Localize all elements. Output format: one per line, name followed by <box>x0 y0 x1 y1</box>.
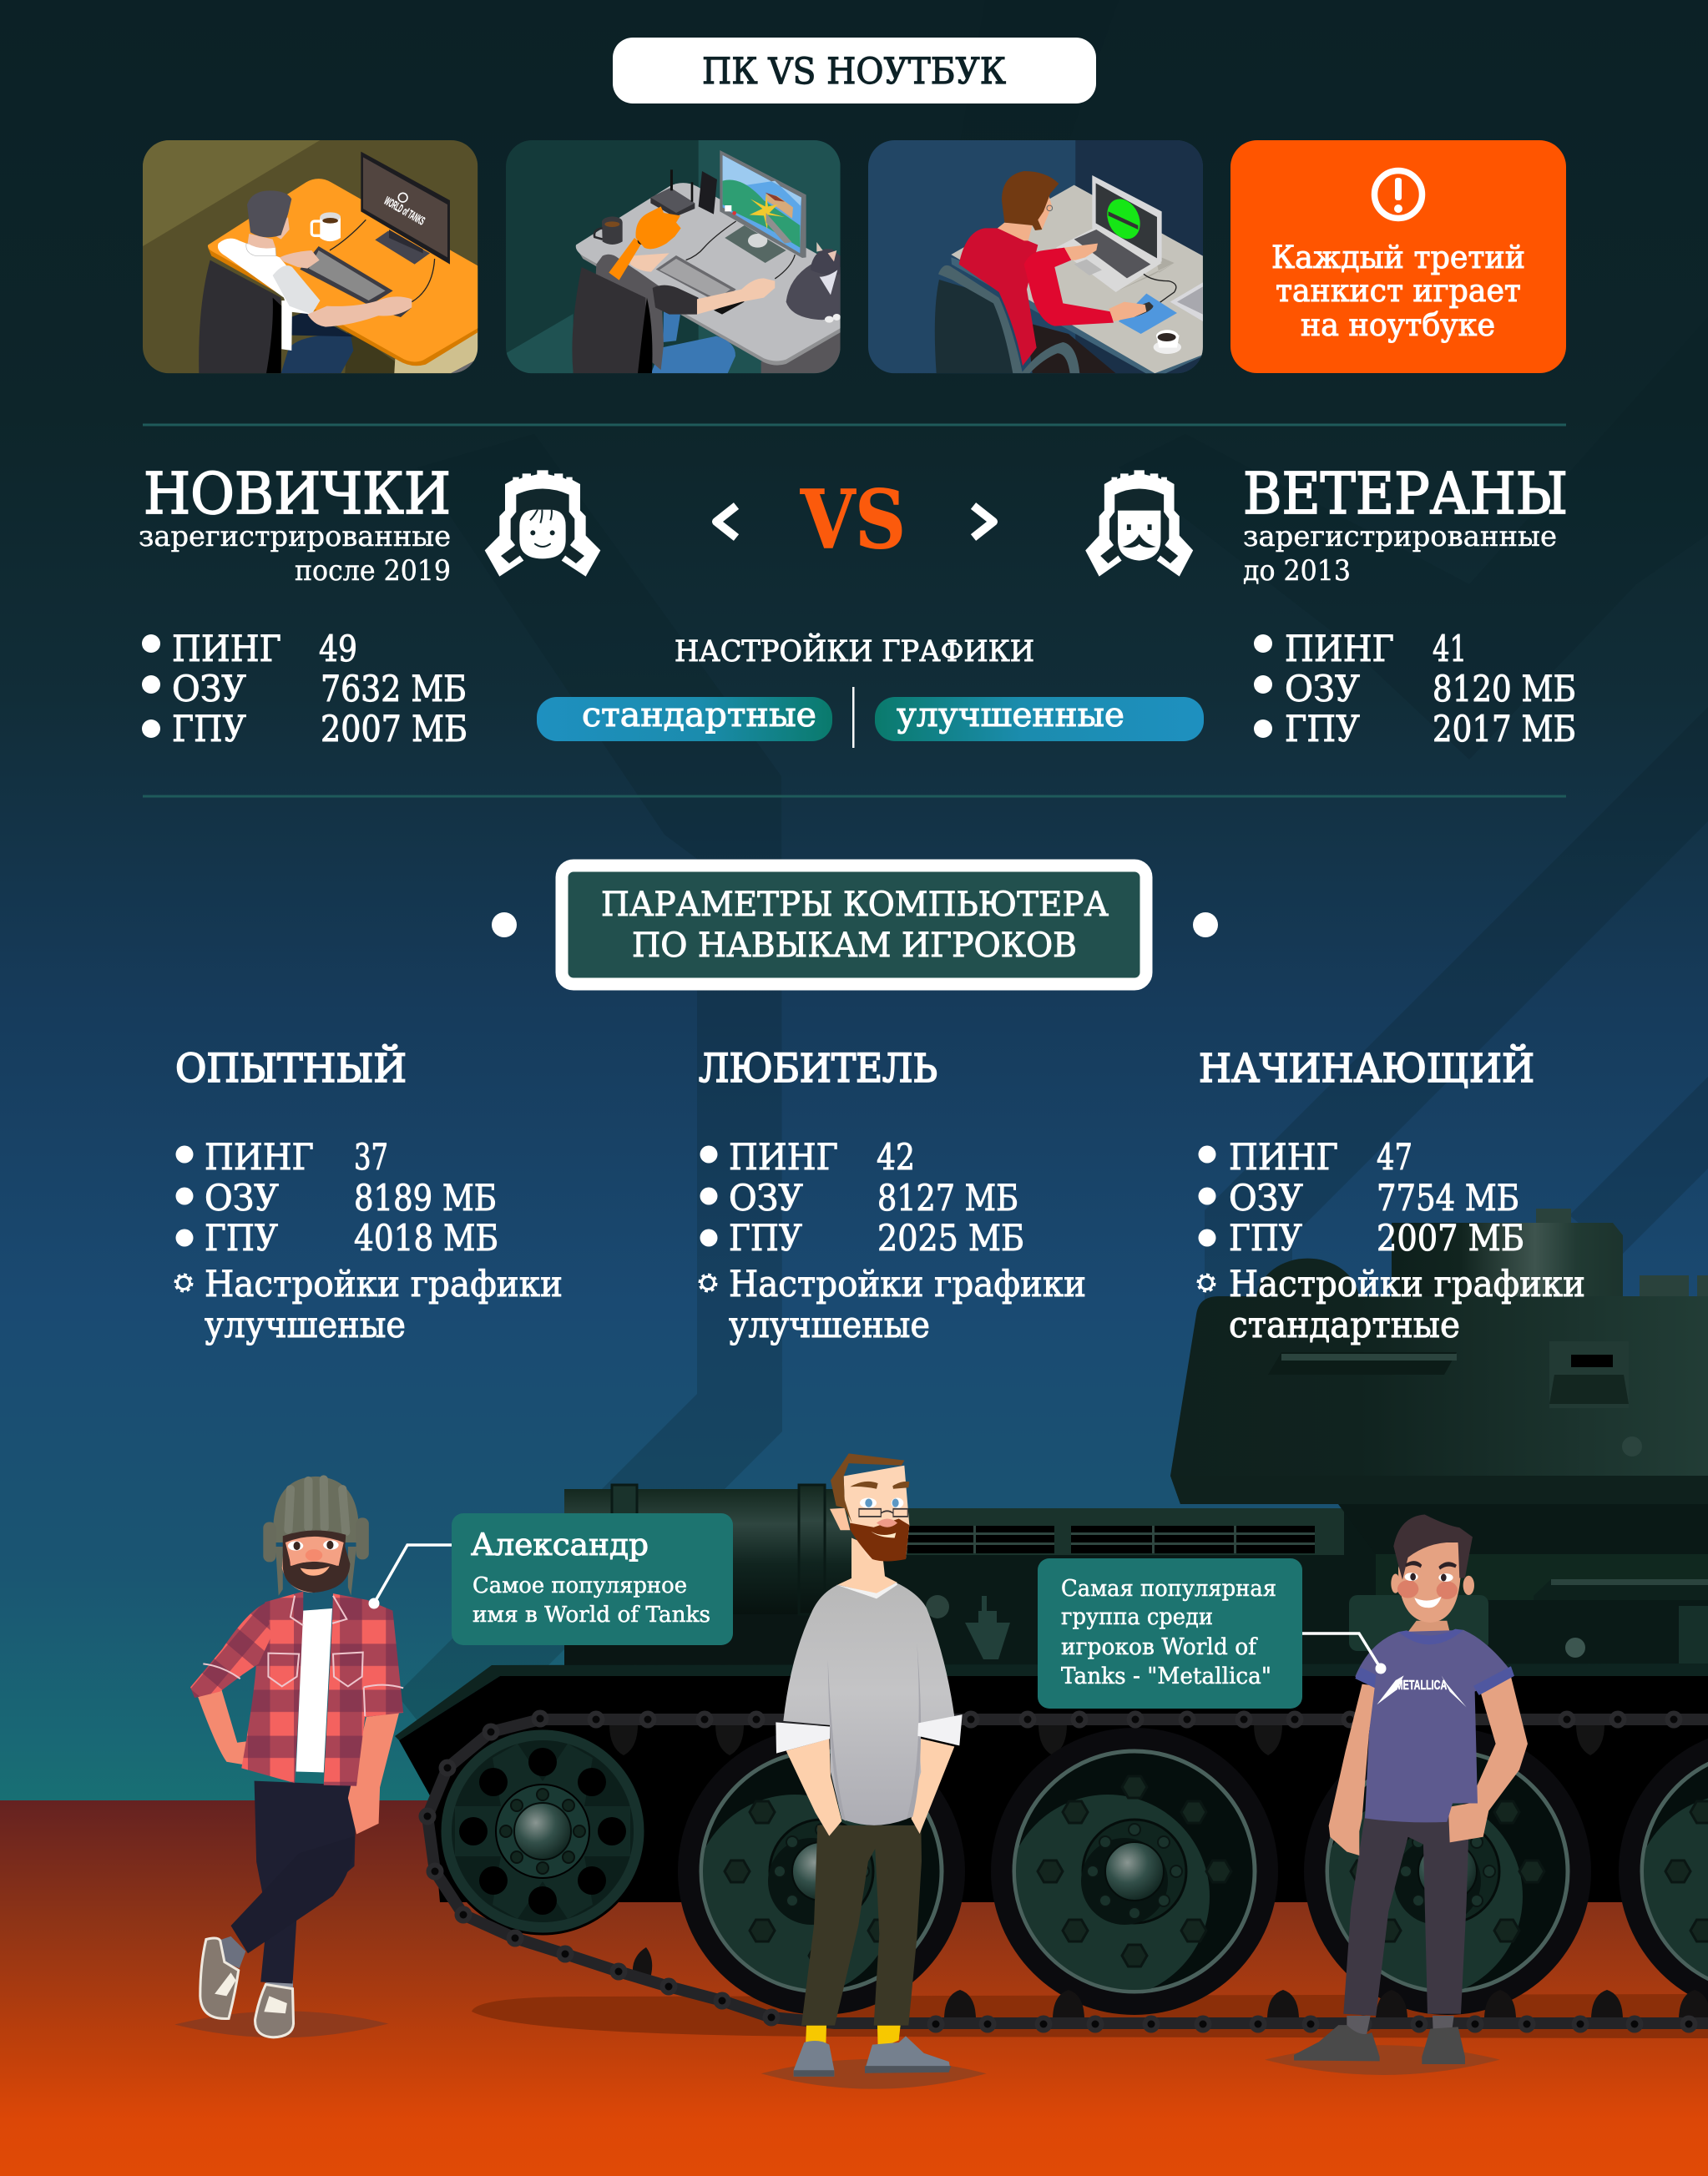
stats: novices <box>142 629 467 750</box>
column: beginner: 47 <box>1377 1137 1412 1179</box>
column: amateur: улучшеные <box>729 1305 930 1346</box>
column: experienced: ПИНГ <box>205 1137 314 1179</box>
column: amateur: 8127 МБ <box>877 1178 1018 1219</box>
column: experienced: 37 <box>354 1137 388 1179</box>
column: experienced <box>175 1044 563 1346</box>
column: beginner: Настройки графики <box>1229 1264 1585 1305</box>
graphics settings legend <box>537 633 1204 748</box>
column: amateur: ГПУ <box>729 1218 802 1260</box>
section heading: ПАРАМЕТРЫ КОМПЬЮТЕРА <box>601 886 1109 924</box>
column: beginner: 7754 МБ <box>1377 1178 1519 1219</box>
stats: veterans <box>1254 629 1576 750</box>
card: orange callout: Каждый третий <box>1271 240 1525 275</box>
person: man in grey sweater <box>761 1453 987 2089</box>
callout: Metallica: Tanks - "Metallica" <box>1061 1664 1271 1689</box>
heading: novices: после 2019 <box>295 554 451 588</box>
column: experienced: ОЗУ <box>205 1178 279 1219</box>
card: orange callout: на ноутбуке <box>1301 307 1495 343</box>
column: beginner: НАЧИНАЮЩИЙ <box>1199 1044 1534 1092</box>
background bands <box>397 0 1708 1763</box>
stats: novices: ОЗУ <box>172 669 246 710</box>
stats: veterans: 2017 МБ <box>1433 709 1576 750</box>
card: PC desk, orange table <box>143 140 478 373</box>
column: experienced: 4018 МБ <box>354 1218 498 1260</box>
section heading <box>492 866 1218 984</box>
ground <box>0 1800 1708 2176</box>
stats: veterans: ГПУ <box>1285 709 1360 750</box>
stats: novices: ГПУ <box>172 709 246 750</box>
column: experienced: 8189 МБ <box>354 1178 497 1219</box>
stats: veterans: 8120 МБ <box>1433 669 1576 710</box>
column: amateur <box>699 1046 1086 1346</box>
chevron right <box>973 506 993 538</box>
stats: novices: 7632 МБ <box>321 669 467 710</box>
stats: veterans: ПИНГ <box>1285 629 1394 670</box>
title pill: ПК VS НОУТБУК <box>702 51 1006 93</box>
callout: Metallica: группа среди <box>1061 1604 1213 1630</box>
column: amateur: ЛЮБИТЕЛЬ <box>699 1046 937 1092</box>
VS label: VS <box>800 472 906 567</box>
column: beginner: ОЗУ <box>1229 1178 1303 1219</box>
hull <box>395 1664 1708 1902</box>
card: PC desk, orange table: WORLD of TANKS <box>382 194 427 228</box>
callout: Alexander: имя в World of Tanks <box>472 1603 710 1628</box>
column: beginner <box>1198 1044 1585 1346</box>
top track fins <box>609 1724 1604 1755</box>
icon: veteran tanker <box>1085 470 1193 577</box>
stats: novices: 2007 МБ <box>321 709 467 750</box>
fuel drum <box>564 1485 865 1666</box>
card: orange callout: танкист играет <box>1276 273 1521 309</box>
card: laptop desk <box>868 140 1203 378</box>
chevron left <box>716 506 736 538</box>
column: amateur: ПИНГ <box>729 1137 838 1179</box>
callout: Metallica: игроков World of <box>1061 1634 1258 1660</box>
callout: Alexander: Самое популярное <box>472 1573 687 1598</box>
column: experienced: Настройки графики <box>205 1264 563 1305</box>
graphics settings legend: НАСТРОЙКИ ГРАФИКИ <box>675 633 1034 669</box>
icon: novice tanker <box>485 470 600 577</box>
shirt print: METALLICA <box>1396 1678 1447 1693</box>
ground shadow of tank <box>472 1994 1708 2038</box>
heading: veterans: ВЕТЕРАНЫ <box>1243 462 1568 528</box>
callout: Alexander: Александр <box>471 1528 649 1563</box>
column: beginner: стандартные <box>1229 1305 1460 1346</box>
tank <box>395 1209 1708 2038</box>
icon: gear <box>1198 1275 1215 1291</box>
column: amateur: ОЗУ <box>729 1178 803 1219</box>
bottom track fins <box>633 1947 1708 2020</box>
column: amateur: 2025 МБ <box>877 1218 1024 1260</box>
turret cupola <box>1256 1209 1708 1297</box>
tank track <box>419 1709 1708 2033</box>
heading: veterans: зарегистрированные <box>1243 520 1557 553</box>
column: amateur: Настройки графики <box>729 1264 1086 1305</box>
stats: veterans: ОЗУ <box>1285 669 1360 710</box>
heading: novices: НОВИЧКИ <box>144 462 451 528</box>
card: PC desk, grey table with cat <box>506 140 841 373</box>
hull deck <box>835 1504 1708 1665</box>
title pill <box>613 38 1096 103</box>
column: experienced: улучшеные <box>205 1305 406 1346</box>
column: experienced: ГПУ <box>205 1218 278 1260</box>
shirt print <box>1377 1675 1467 1707</box>
graphics settings legend: стандартные <box>582 696 816 735</box>
stats: novices: ПИНГ <box>172 629 281 670</box>
section heading: ПО НАВЫКАМ ИГРОКОВ <box>632 926 1077 965</box>
heading: novices <box>139 462 451 588</box>
turret <box>1170 1296 1708 1504</box>
column: beginner: ГПУ <box>1229 1218 1302 1260</box>
column: beginner: ПИНГ <box>1229 1137 1338 1179</box>
idler wheel <box>440 1729 645 1934</box>
stats: veterans: 41 <box>1433 629 1467 670</box>
callout: Metallica: Самая популярная <box>1061 1576 1276 1602</box>
graphics settings legend: улучшенные <box>897 696 1124 735</box>
icon: gear <box>175 1275 192 1291</box>
card: orange callout <box>1230 140 1566 373</box>
column: beginner: 2007 МБ <box>1377 1218 1524 1260</box>
column: experienced: ОПЫТНЫЙ <box>175 1044 407 1092</box>
road wheels <box>678 1728 1708 2015</box>
stats: novices: 49 <box>319 629 357 670</box>
heading: novices: зарегистрированные <box>139 520 451 553</box>
callout: Metallica <box>1038 1558 1386 1709</box>
icon: exclamation mark <box>1374 170 1422 219</box>
person: Alexander <box>174 1477 403 2037</box>
heading: veterans: до 2013 <box>1243 554 1351 588</box>
callout: Alexander <box>369 1513 733 1645</box>
person: man in Metallica t-shirt <box>1265 1515 1528 2075</box>
column: amateur: 42 <box>877 1137 915 1179</box>
icon: gear <box>700 1275 716 1291</box>
heading: veterans <box>1243 462 1568 588</box>
